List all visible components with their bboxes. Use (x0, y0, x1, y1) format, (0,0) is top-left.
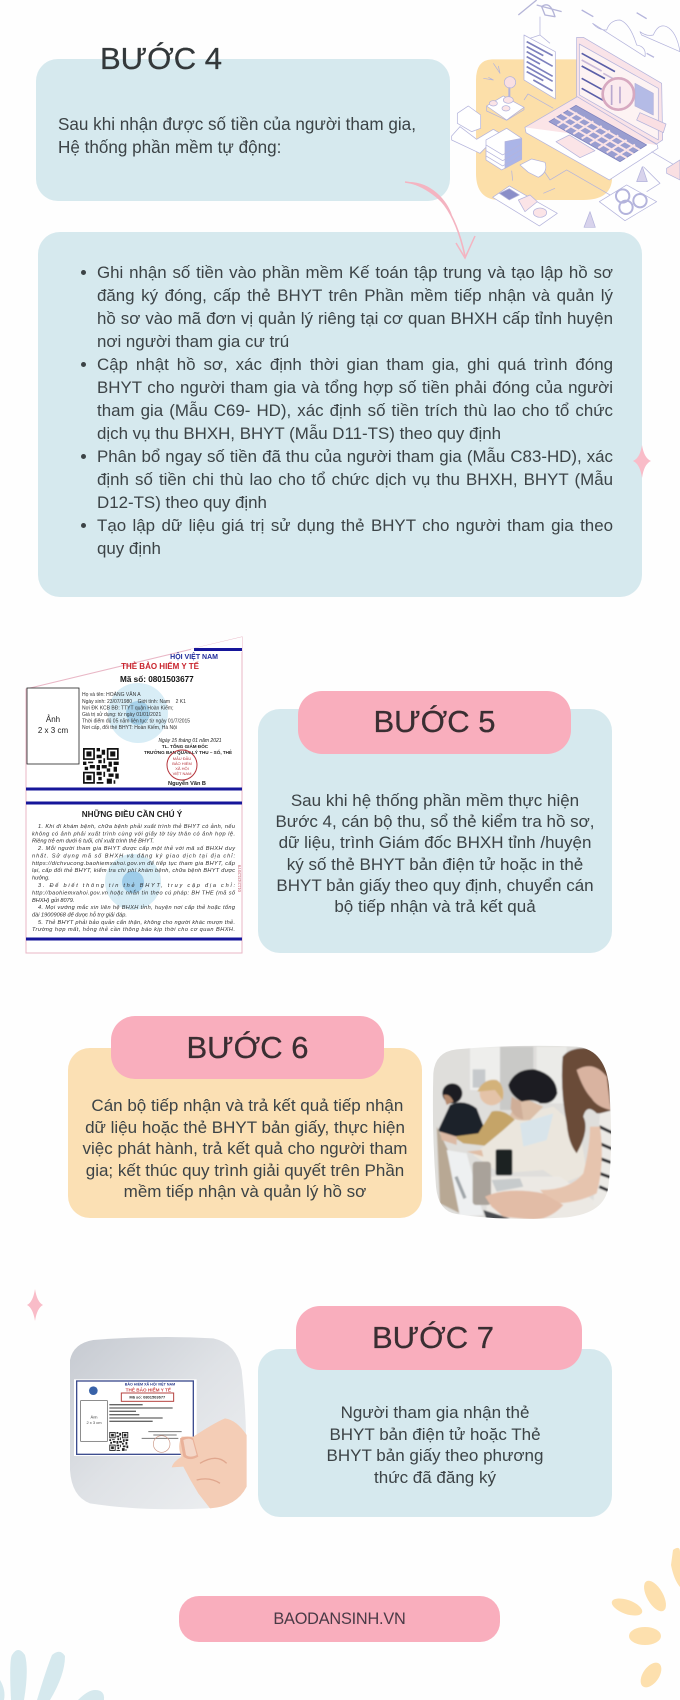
heading: step 4: BƯỚC 4 (100, 41, 222, 76)
list: step 4 bullets (81, 263, 613, 558)
image: health insurance card: Thời điểm đủ 05 năm liên tục: từ ngày 01/7/2015 (82, 718, 190, 724)
image: health insurance card: Họ và tên: HOÀNG VĂN A (82, 691, 141, 698)
heading: step 7: BƯỚC 7 (372, 1320, 494, 1355)
image: health insurance card: HỘI VIỆT NAM (170, 652, 218, 661)
list: step 4 bullets: BHYT cho người tham gia và tổng hợp số tiền phải đóng của người (97, 378, 613, 397)
footer pill (179, 1596, 500, 1642)
text: step 7: Người tham gia nhận thẻ (341, 1403, 529, 1422)
image: students at laptops (433, 1046, 612, 1219)
text: step 6: Cán bộ tiếp nhận và trả kết quả tiếp nhận (91, 1096, 403, 1115)
text: step 5: ký số thẻ BHYT bản điện tử hoặc in thẻ (287, 855, 583, 874)
list: step 4 bullets: nơi người tham gia cư trú (97, 332, 289, 351)
text: step 6: việc phát hành, trả kết quả cho người tham (83, 1139, 407, 1158)
text: step 4 intro: Sau khi nhận được số tiền của người tham gia, (58, 115, 416, 134)
text: step 5: Sau khi hệ thống phần mềm thực hiện (291, 791, 579, 810)
image: hand holding insurance card: Ảnh (90, 1415, 98, 1420)
text: step 5: dữ liệu, trình Giám đốc BHXH tỉnh /huyện (279, 833, 591, 852)
image: hand holding insurance card: Mã số: 0801503677 (129, 1395, 166, 1400)
list: step 4 bullets: Tạo lập dữ liệu giá trị sử dụng thẻ BHYT cho người tham gia theo (97, 516, 613, 535)
list: step 4 bullets: định số tiền chi thù lao cho tổ chức dịch vụ thu BHXH, BHYT (Mẫu (97, 470, 613, 489)
image: health insurance card: BHXH) gửi 8079. (32, 897, 74, 904)
list: step 4 bullets: Cập nhật hồ sơ, xác định thời gian tham gia, ghi quá trình đóng (97, 355, 613, 374)
image: health insurance card: Riêng trẻ em dưới 6 tuổi, chỉ xuất trình thẻ BHYT. (32, 838, 154, 844)
image: hand holding insurance card: THẺ BẢO HIỂM Y TẾ (126, 1387, 171, 1393)
pill: step 5 heading (298, 691, 571, 754)
text: step 6 (82, 1096, 407, 1201)
image: health insurance card: 3. Để biết thông tin thẻ BHYT, truy cập địa chỉ: (38, 882, 235, 889)
image: health insurance card: Nơi ĐK KCB BĐ: TTYT quận Hoàn Kiếm; (82, 706, 173, 712)
panel: step 6 (68, 1048, 422, 1218)
list: step 4 bullets: Phân bổ ngay số tiền đã thu của người tham gia (Mẫu C83-HD), xác (97, 447, 613, 466)
list: step 4 bullets: dịch vụ thu BHXH, BHYT (Mẫu D11-TS) theo quy định (97, 424, 501, 443)
heading: step 5: BƯỚC 5 (374, 704, 495, 739)
icon: pink sparkle left (27, 1290, 43, 1320)
list: step 4 bullets: D12-TS) theo quy định (97, 493, 267, 512)
image: health insurance card: TRƯỞNG BAN QUẢN LÝ THU – SỐ, THẺ (144, 749, 232, 755)
image: health insurance card: XÃ HỘI (175, 766, 189, 771)
pill: step 7 heading (296, 1306, 582, 1370)
list: step 4 bullets: hồ sơ vào mã đơn vị quản lý riêng tại cơ quan BHXH cấp tỉnh huyện (97, 309, 613, 328)
image: health insurance card (26, 636, 242, 954)
text: step 7 (327, 1403, 543, 1486)
image: health insurance card: 2. Mỗi người tham gia BHYT được cấp một thẻ với mã số BHXH duy (37, 845, 236, 852)
image: hand holding insurance card: 2 x 3 cm (86, 1420, 102, 1425)
text: step 6: mềm tiếp nhận và quản lý hồ sơ (124, 1182, 366, 1201)
image: health insurance card: hưởng. (32, 874, 50, 882)
text: step 5 (275, 791, 595, 916)
text: step 7: BHYT bản giấy theo phương (327, 1446, 543, 1465)
image: health insurance card: Nơi cấp, đổi thẻ BHYT: Hoàn Kiếm, Hà Nội (82, 724, 177, 731)
image: health insurance card: đài 19009068 để được hỗ trợ giải đáp. (32, 912, 127, 918)
heading: step 6: BƯỚC 6 (186, 1030, 308, 1065)
list: step 4 bullets: Ghi nhận số tiền vào phần mềm Kế toán tập trung và tạo lập hồ sơ (97, 263, 613, 282)
image: health insurance card: THẺ BẢO HIỂM Y TẾ (121, 661, 200, 671)
icon: pink sparkle right (633, 446, 651, 478)
image: health insurance card: không có ảnh phải xuất trình cùng với giấy tờ tùy thân có ảnh hợp lệ. (32, 830, 235, 838)
footer text: BAODANSINH.VN (273, 1610, 406, 1628)
panel: step 5 (258, 709, 612, 953)
text: step 5: bộ tiếp nhận và trả kết quả (334, 897, 536, 916)
image: health insurance card: https://dichvucong.baohiemxahoi.gov.vn để tiếp tục tham gia BHYT, cấp (32, 860, 235, 867)
image: health insurance card: Nguyễn Văn B (168, 780, 206, 787)
text: step 6: dữ liệu hoặc thẻ BHYT bản giấy, thực hiện (85, 1118, 405, 1136)
text: step 7: BHYT bản điện tử hoặc Thẻ (329, 1424, 541, 1444)
image: health insurance card: VIỆT NAM (173, 771, 191, 776)
image: health insurance card: TL. TỔNG GIÁM ĐỐC (162, 743, 209, 749)
panel: step 7 (258, 1349, 612, 1517)
image: health insurance card: Ngày sinh: 23/07/1980 Giới tính: Nam 2 K1 (82, 699, 186, 705)
pill: step 6 heading (111, 1016, 384, 1079)
text: step 4 intro: Hệ thống phần mềm tự động: (58, 138, 281, 157)
image: health insurance card: MẪU ĐẦU (173, 756, 191, 761)
text: step 5: BHYT bản giấy theo quy định, chuyển cán (276, 876, 594, 895)
arrow: pink curved connector (405, 181, 476, 260)
image: health insurance card: nhất. Sử dụng mã số BHXH và đăng ký giao dịch tại địa chỉ: (32, 852, 235, 860)
text: step 7: thức đã đăng ký (374, 1468, 496, 1486)
text: step 4 intro (58, 115, 416, 157)
image: health insurance card: Mã số: 0801503677 (120, 675, 194, 684)
panel: step 4 details (38, 232, 642, 597)
image: health insurance card: 1. Khi đi khám bệnh, chữa bệnh phải xuất trình thẻ BHYT có ảnh, nếu (38, 823, 235, 830)
image: health insurance card: Giá trị sử dụng: từ ngày 01/01/2021 (82, 711, 161, 718)
image: health insurance card: 01124312079 (237, 864, 242, 892)
list: step 4 bullets: tham gia (Mẫu C69- HD), xác định số tiền trích thù lao cho tổ chức (97, 401, 613, 420)
image: health insurance card: 2 x 3 cm (38, 726, 68, 735)
image: health insurance card: 5. Thẻ BHYT phải bảo quản cẩn thận, không cho người khác mượn thẻ. (38, 919, 235, 926)
image: health insurance card: 4. Mọi vướng mắc xin liên hệ BHXH tỉnh, huyện nơi cấp thẻ hoặc tổng (38, 904, 236, 911)
panel: step 4 intro (36, 59, 450, 201)
image: health insurance card: http://baohiemxahoi.gov.vn hoặc nhắn tin theo cú pháp: BH THE (mã số (32, 890, 236, 896)
image: hand holding insurance card: BẢO HIỂM XÃ HỘI VIỆT NAM (125, 1381, 175, 1386)
image: health insurance card: Ảnh (46, 715, 60, 724)
text: step 6: gia; kết thúc quy trình giải quyết trên Phần (86, 1160, 404, 1180)
image: health insurance card: NHỮNG ĐIỀU CẦN CHÚ Ý (82, 808, 183, 819)
image: health insurance card: Ngày 15 tháng 01 năm 2021 (158, 738, 222, 744)
list: step 4 bullets: quy định (97, 539, 161, 558)
image: health insurance card: BẢO HIỂM (172, 761, 192, 766)
text: step 5: Bước 4, cán bộ thu, sổ thẻ kiểm tra hồ sơ, (275, 812, 595, 831)
image: health insurance card: lại, cấp đổi thẻ BHYT, kiểm tra chi phí khám bệnh, chữa bệnh BHYT được (32, 867, 235, 874)
illustration: laptop and isometric devices (451, 0, 680, 228)
list: step 4 bullets: đăng ký đóng, cấp thẻ BHYT trên Phần mềm tiếp nhận và quản lý (97, 286, 613, 305)
image: health insurance card: Trường hợp mất, hỏng thẻ cần thông báo kịp thời cho cơ quan BHXH. (32, 926, 235, 933)
